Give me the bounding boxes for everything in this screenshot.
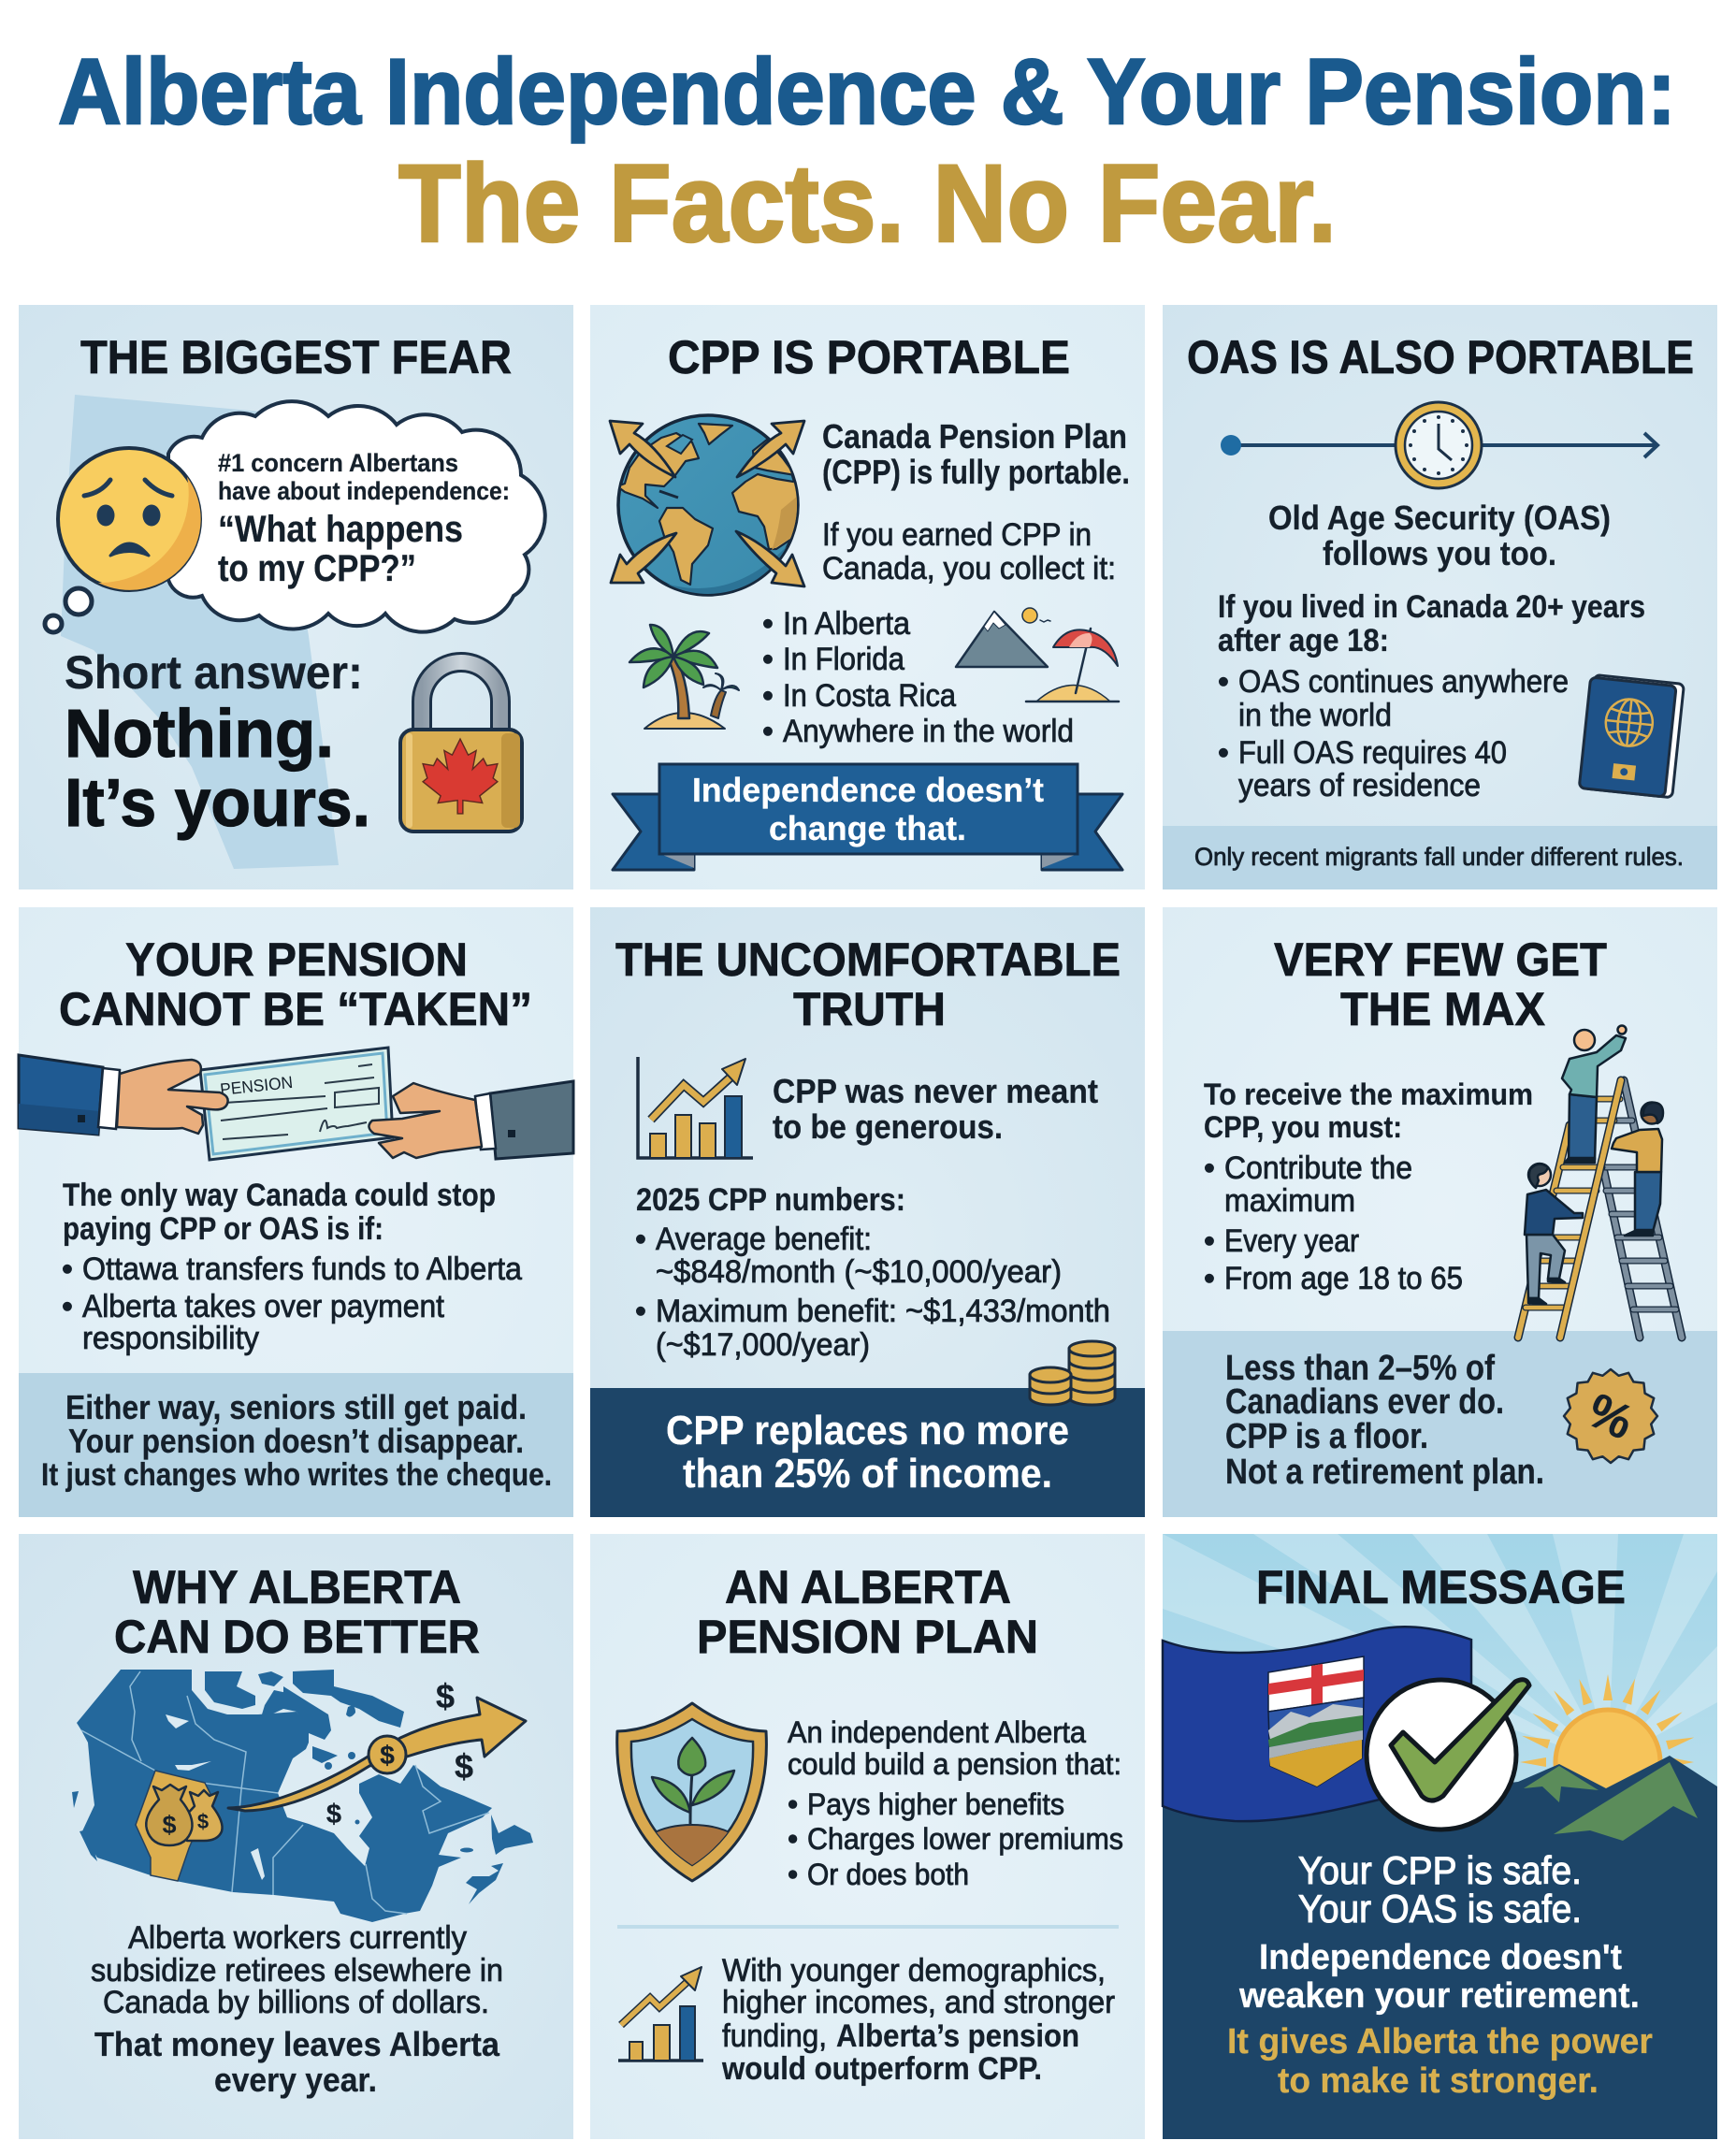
body text: Alberta takes over payment [82,1289,445,1324]
intro text: Canada, you collect it: [822,551,1116,586]
banner ribbon: change that. [769,809,966,847]
panel: an Alberta pension plan [590,1534,1145,2139]
location bullet list: In Alberta [783,606,910,642]
outperform text: would outperform CPP. [721,2051,1042,2087]
band text: It just changes who writes the cheque. [41,1457,552,1493]
heading: CAN DO BETTER [114,1611,480,1663]
requirements text: CPP, you must: [1204,1110,1402,1144]
2025 CPP numbers: ~$848/month (~$10,000/year) [656,1254,1062,1290]
eligibility text: years of residence [1238,768,1481,803]
icon: Alberta flag [1163,1627,1471,1821]
requirements text: maximum [1224,1183,1355,1219]
closing message: It gives Alberta the power [1227,2022,1653,2061]
closing message: to make it stronger. [1278,2061,1599,2101]
intro text [822,417,1130,586]
title line 2: The Facts. No Fear. [398,142,1337,266]
closing message: Your OAS is safe. [1298,1887,1582,1931]
heading: VERY FEW GET [1274,933,1607,986]
band text: Less than 2–5% of [1225,1349,1495,1388]
short answer text: Nothing. [65,697,334,772]
bubble text: to my CPP?” [218,548,416,589]
bubble text [218,449,510,589]
panel: the uncomfortable truth [590,907,1145,1517]
heading: TRUTH [793,983,946,1035]
benefits text: • [788,1822,798,1856]
bottom band [19,1373,573,1517]
outperform text: Alberta’s pension [836,2018,1079,2054]
2025 CPP numbers [635,1182,1110,1363]
body text: paying CPP or OAS is if: [63,1211,383,1247]
requirements text: • [1204,1223,1215,1259]
body text: responsibility [82,1321,259,1356]
icon: check mark in circle [1367,1680,1529,1830]
closing message: Independence doesn't [1259,1938,1622,1977]
2025 CPP numbers: 2025 CPP numbers: [636,1182,905,1218]
heading: CANNOT BE “TAKEN” [59,983,532,1035]
sky rays [1163,1534,1717,1762]
outperform text: With younger demographics, [722,1953,1106,1989]
location bullet list: • [762,678,774,714]
closing message [1227,1848,1653,2101]
2025 CPP numbers: (~$17,000/year) [656,1327,870,1363]
icon: percent badge [1564,1369,1657,1463]
bubble text: “What happens [218,509,463,550]
icon: mountains [1518,1756,1717,1841]
band text: CPP is a floor. [1225,1417,1428,1456]
location bullet list: • [762,642,774,677]
crest [1268,1656,1364,1786]
band text [666,1408,1069,1497]
body text: The only way Canada could stop [63,1178,496,1213]
lead text: CPP was never meant [773,1072,1098,1110]
benefits text: could build a pension that: [788,1747,1121,1781]
benefits text: • [788,1787,798,1821]
heading: AN ALBERTA [725,1561,1011,1613]
icon: mountain and sun [956,608,1050,667]
location bullet list: Anywhere in the world [783,714,1074,749]
person at right [1612,1102,1663,1236]
outperform text [721,1953,1115,2087]
gray ladder [1602,1080,1682,1338]
person at left [1525,1164,1583,1304]
short answer text [65,646,370,841]
heading [697,1561,1038,1663]
band note: Only recent migrants fall under different rules. [1194,843,1684,871]
dollar signs: $ [455,1747,473,1786]
body text: every year. [214,2061,377,2099]
icon: worried face [58,448,201,590]
dark ground [1163,1782,1717,2139]
short answer text: Short answer: [65,646,363,699]
body text: • [62,1289,73,1324]
timeline with clock [1221,402,1657,488]
short answer text: It’s yours. [65,766,370,841]
benefits text: An independent Alberta [788,1715,1086,1749]
band text: than 25% of income. [683,1451,1052,1497]
body text: That money leaves Alberta [94,2025,500,2063]
body text: Canada by billions of dollars. [103,1985,489,2020]
requirements text: • [1204,1150,1215,1186]
2025 CPP numbers: • [635,1294,646,1329]
icon: Alberta map silhouette [61,395,339,869]
band text: Either way, seniors still get paid. [65,1388,527,1426]
gold ladder front rail [1560,1080,1621,1338]
icon: growth chart [618,1967,703,2061]
heading: FINAL MESSAGE [1256,1561,1626,1613]
bottom band [1163,1331,1717,1517]
icon: money bags: $ [162,1811,177,1839]
band text [1225,1349,1544,1492]
person on top [1562,1025,1626,1163]
benefits text [788,1715,1123,1891]
2025 CPP numbers: • [635,1222,646,1257]
heading: THE UNCOMFORTABLE [615,933,1121,986]
body text: • [62,1251,73,1287]
icon: coin stacks [1030,1341,1115,1405]
subheading: Old Age Security (OAS) [1268,499,1611,537]
body text: Ottawa transfers funds to Alberta [82,1251,522,1287]
arrow: money flowing out [228,1698,526,1811]
requirements text: From age 18 to 65 [1224,1261,1463,1296]
body text [91,1920,503,2099]
eligibility text: Full OAS requires 40 [1238,735,1507,771]
closing message: Your CPP is safe. [1298,1848,1582,1892]
eligibility text [1218,589,1645,803]
outperform text: funding, [722,2018,827,2054]
requirements text [1204,1078,1533,1296]
heading [615,933,1121,1035]
benefits text: • [788,1858,798,1891]
icon: percent badge: % [1579,1383,1642,1451]
icon: globe with arrows [610,415,804,599]
band text: Not a retirement plan. [1225,1453,1544,1492]
heading: WHY ALBERTA [133,1561,461,1613]
heading: YOUR PENSION [125,933,468,986]
icon: money bags: $ [197,1810,209,1833]
location bullet list [762,606,1074,749]
heading [1274,933,1607,1035]
intro text: Canada Pension Plan [822,417,1127,456]
banner ribbon [613,764,1122,870]
heading [114,1561,480,1663]
eligibility text: after age 18: [1218,623,1389,658]
eligibility text: • [1218,735,1229,771]
icon: shield with sprout [617,1703,766,1888]
benefits text: Charges lower premiums [807,1822,1123,1856]
panel: your pension cannot be taken [19,907,573,1517]
requirements text: Contribute the [1224,1150,1412,1186]
icon: passport [1579,674,1684,798]
gold ladder back rail [1518,1099,1620,1338]
benefits text: Or does both [807,1858,969,1891]
dollar signs: $ [436,1677,455,1715]
panel: CPP is portable [590,305,1145,889]
intro text: If you earned CPP in [822,517,1092,553]
body text [62,1178,522,1356]
thought bubble [45,401,545,632]
panel: why Alberta can do better [19,1534,573,2139]
band text: CPP replaces no more [666,1408,1069,1454]
location bullet list: In Florida [783,642,904,677]
illustration: hands passing pension cheque [19,1048,573,1160]
heading: THE MAX [1340,983,1545,1035]
location bullet list: • [762,606,774,642]
intro text: (CPP) is fully portable. [822,453,1130,491]
dollar signs [326,1677,473,1830]
icon: palm trees [629,625,739,729]
subheading: follows you too. [1323,534,1556,572]
bubble text: #1 concern Albertans [218,449,458,477]
bubble text: have about independence: [218,477,510,505]
illustration: people on ladders [1518,1025,1682,1338]
icon: coin [369,1736,406,1773]
icon: padlock with maple leaf [400,662,522,832]
2025 CPP numbers: Average benefit: [656,1222,872,1257]
title line 1: Alberta Independence & Your Pension: [58,39,1676,143]
heading: PENSION PLAN [697,1611,1038,1663]
panel: final message [1163,1534,1717,2139]
dollar signs: $ [326,1800,341,1830]
band text: Your pension doesn’t disappear. [68,1422,524,1460]
icon: beach umbrella [1026,629,1119,701]
bottom band [1163,826,1717,889]
location bullet list: In Costa Rica [783,678,956,714]
icon: rising bar chart [638,1057,753,1158]
heading: THE BIGGEST FEAR [80,331,512,383]
band text [41,1388,552,1493]
panel: the biggest fear [19,305,573,889]
banner ribbon: Independence doesn’t [692,771,1044,809]
heading [59,933,532,1035]
panel: very few get the max [1163,907,1717,1517]
title [58,39,1676,266]
lead text: to be generous. [773,1107,1003,1146]
eligibility text: If you lived in Canada 20+ years [1218,589,1645,625]
outperform text: higher incomes, and stronger [722,1985,1115,2020]
eligibility text: • [1218,664,1229,700]
2025 CPP numbers: Maximum benefit: ~$1,433/month [656,1294,1110,1329]
icon: coin: $ [380,1741,395,1770]
requirements text: Every year [1224,1223,1359,1259]
panel: OAS is also portable [1163,305,1717,889]
requirements text: • [1204,1261,1215,1296]
lead text [773,1072,1098,1146]
eligibility text: OAS continues anywhere [1238,664,1569,700]
benefits text: Pays higher benefits [807,1787,1064,1821]
location bullet list: • [762,714,774,749]
body text: Alberta workers currently [128,1920,467,1956]
requirements text: To receive the maximum [1204,1078,1533,1111]
illustration: hands passing pension cheque: PENSION [219,1073,294,1099]
bottom band [590,1388,1145,1517]
icon: money bags [146,1785,223,1845]
heading: CPP IS PORTABLE [668,331,1070,383]
eligibility text: in the world [1238,698,1392,733]
closing message: weaken your retirement. [1238,1976,1640,2016]
body text: subsidize retirees elsewhere in [91,1953,503,1989]
icon: sun [1520,1674,1696,1815]
band text: Canadians ever do. [1225,1382,1504,1422]
subheading [1268,499,1611,572]
map: Canada with Alberta highlighted [72,1670,533,1922]
